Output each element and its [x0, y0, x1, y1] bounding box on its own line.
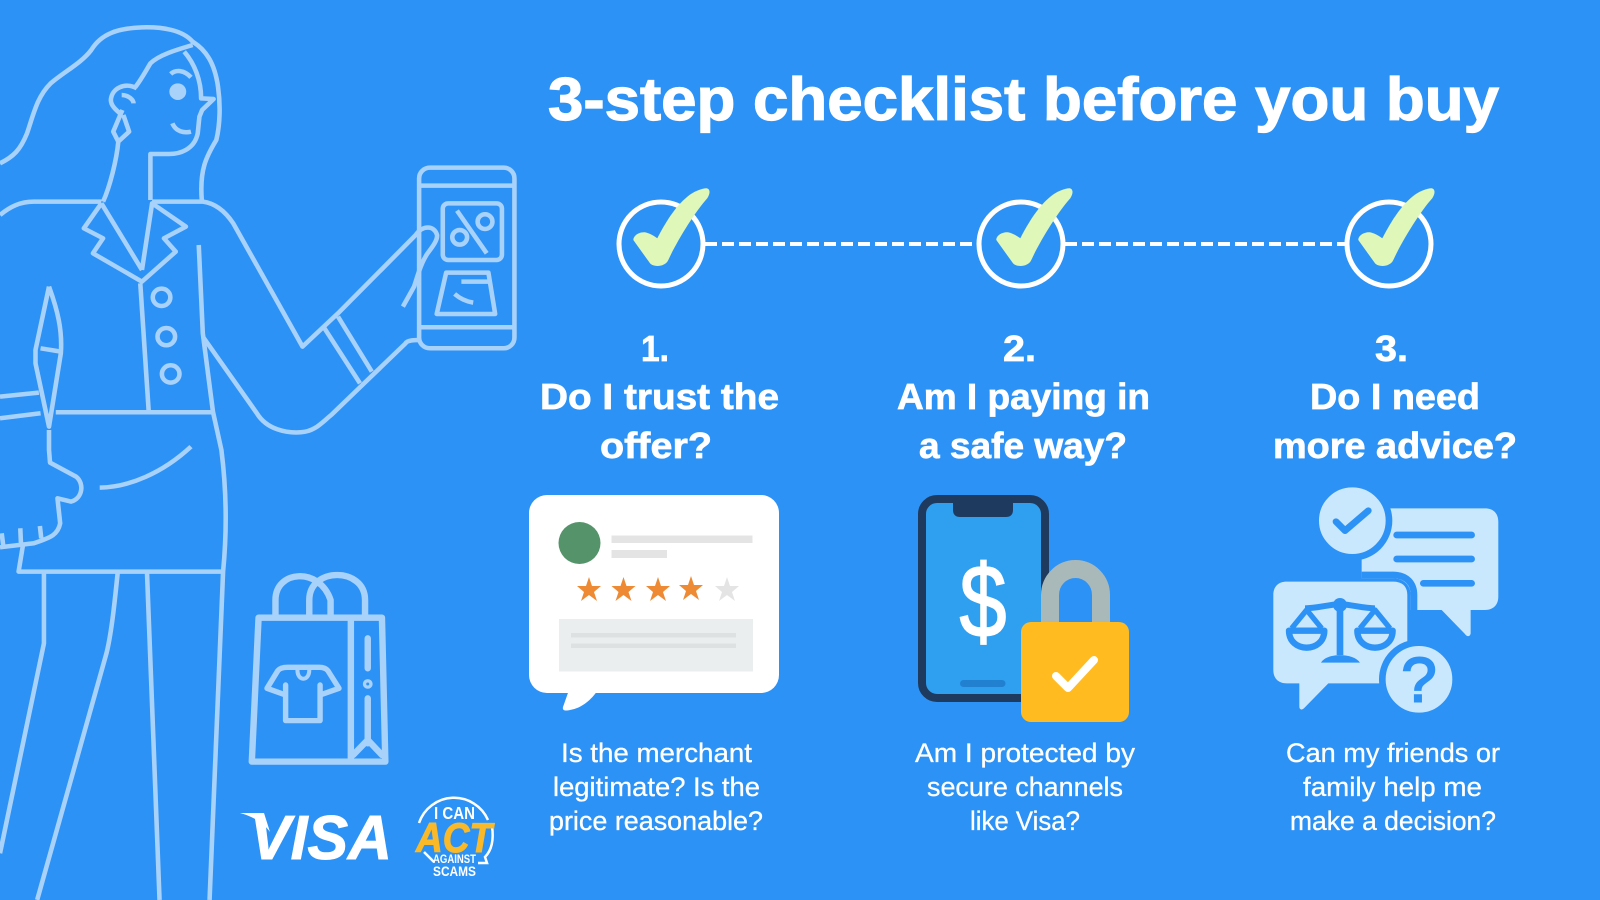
dashed connector lines — [705, 242, 1346, 246]
logo: I can act against scams: ACT — [415, 814, 495, 861]
padlock check — [1056, 660, 1094, 688]
icon: advice speech bubbles — [1273, 484, 1498, 716]
title: 3-step checklist before you buy — [548, 66, 1500, 133]
step 3 description: Can my friends or — [1286, 738, 1500, 768]
logo: Visa: VISA — [250, 804, 392, 873]
question circle — [1382, 643, 1456, 716]
logo: I can act against scams: AGAINST — [433, 854, 476, 866]
torso lines — [0, 245, 226, 900]
left bubble — [1273, 575, 1414, 710]
step 3 description: family help me — [1303, 772, 1482, 802]
buttons — [153, 289, 179, 383]
home bar — [960, 680, 1006, 687]
step 1 check icon — [619, 188, 710, 286]
review text box — [559, 619, 753, 672]
t-shirt — [267, 667, 339, 721]
collar — [84, 203, 186, 412]
logo: I can act against scams: SCAMS — [433, 863, 476, 879]
skirt and legs — [0, 545, 223, 900]
padlock body — [1021, 622, 1129, 722]
step 2 description: like Visa? — [970, 806, 1080, 836]
notch — [953, 497, 1013, 517]
step 1 description — [549, 738, 763, 836]
step 3 heading: more advice? — [1273, 425, 1517, 466]
step 2 heading: a safe way? — [919, 425, 1127, 466]
step 1 heading — [540, 328, 779, 466]
step 3 heading: 3. — [1375, 328, 1408, 369]
star rating — [577, 576, 739, 601]
name lines — [612, 536, 752, 558]
step 2 heading: 2. — [1003, 328, 1036, 369]
check circle — [1316, 484, 1389, 557]
step 1 heading: Do I trust the — [540, 376, 779, 417]
phone — [922, 499, 1045, 698]
eye — [169, 83, 186, 100]
step 3 heading — [1273, 328, 1517, 466]
icon: shopping bag — [252, 575, 385, 762]
step 1 description: price reasonable? — [549, 806, 763, 836]
step 1 heading: offer? — [600, 425, 712, 466]
step 2 check icon — [979, 188, 1073, 286]
face — [103, 45, 214, 202]
dollar sign: $ — [959, 544, 1007, 660]
avatar — [558, 522, 600, 564]
jacket and arm — [0, 202, 437, 432]
logo: I can act against scams: I CAN — [434, 803, 475, 823]
logo: I can act against scams — [415, 798, 495, 879]
speech bubble — [563, 690, 598, 711]
step 1 heading: 1. — [641, 328, 669, 369]
step 3 check icon — [1347, 188, 1435, 286]
step 3 description — [1286, 738, 1500, 836]
step 2 heading: Am I paying in — [897, 376, 1150, 417]
step 2 heading — [897, 328, 1150, 466]
step 2 description: Am I protected by — [915, 738, 1136, 768]
padlock shackle — [1050, 569, 1101, 630]
step 1 description: Is the merchant — [561, 738, 753, 768]
icon: review card — [529, 495, 779, 711]
question circle: ? — [1401, 646, 1437, 716]
icon: phone with padlock — [922, 497, 1129, 722]
step 3 description: make a decision? — [1290, 806, 1496, 836]
step 3 heading: Do I need — [1310, 376, 1480, 417]
right bubble — [1362, 508, 1498, 636]
phone outline — [419, 168, 514, 348]
step 2 description — [915, 738, 1136, 836]
step 1 description: legitimate? Is the — [553, 772, 760, 802]
hair — [0, 27, 220, 200]
step 2 description: secure channels — [927, 772, 1123, 802]
illustration: woman holding phone — [0, 27, 514, 900]
scales of justice — [1289, 598, 1393, 663]
